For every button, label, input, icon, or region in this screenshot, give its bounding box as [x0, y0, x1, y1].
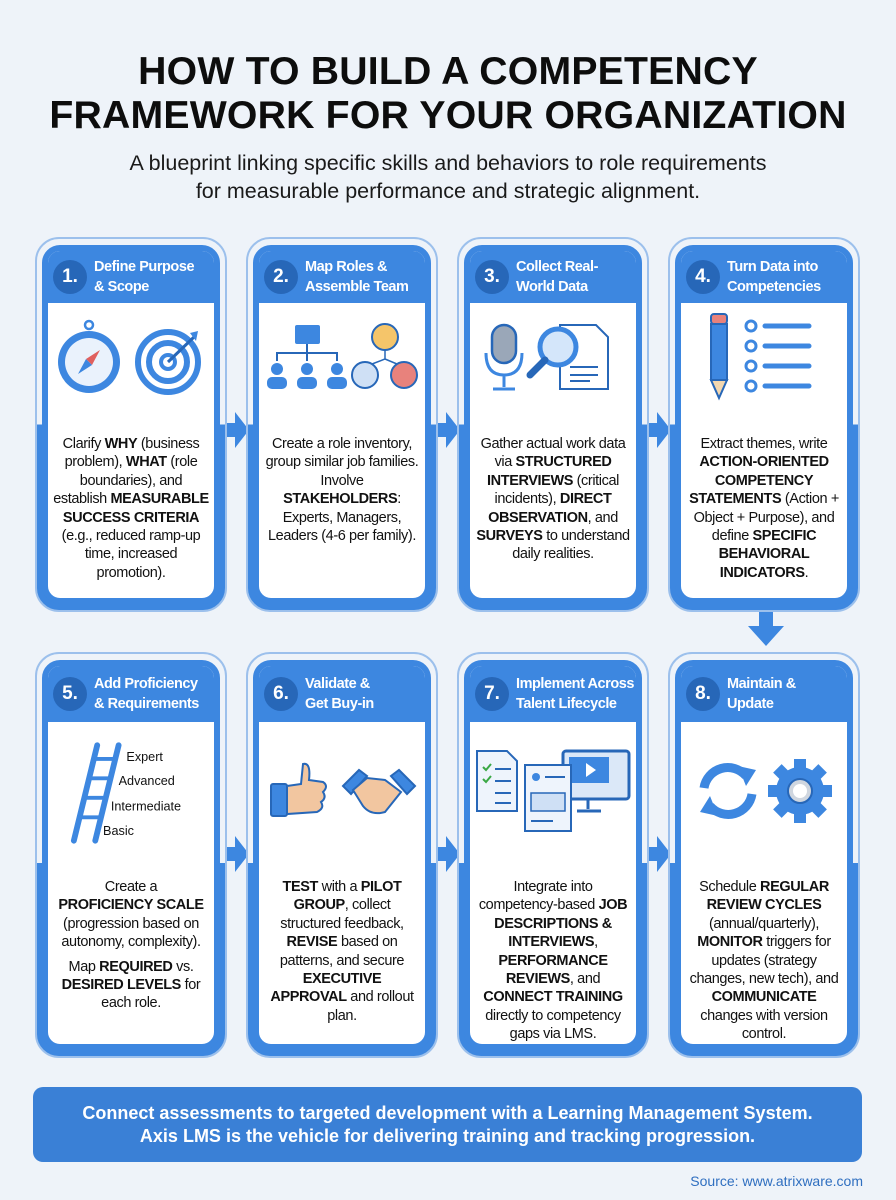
panel: step 5: & Requirements [94, 696, 199, 712]
panel: step 3: World Data [516, 279, 588, 295]
panel: step 6: Get Buy-in [305, 696, 374, 712]
text: step 4: Extract themes, write ACTION-ORIENTED COMPETENCY STATEMENTS (Action + Object + Purpose), and define SPECIFIC BEHAVIORAL INDICATORS. [689, 436, 839, 581]
text: step 3: Gather actual work data via STRUCTURED INTERVIEWS (critical incidents), DIRECT OBSERVATION, and SURVEYS to understand daily realities. [476, 436, 630, 562]
subtitle [130, 151, 766, 203]
text: step 5: PROFICIENCY SCALE (progression based on autonomy, complexity). Map REQUIRED vs. DESIRED LEVELS for each role. [58, 897, 204, 1011]
panel: step 3: 3. [484, 266, 500, 287]
panel: step 5 [35, 652, 227, 1058]
panel: step 1: Define Purpose [94, 259, 194, 275]
arrow 3-4 [649, 412, 668, 448]
panel: step 2: Map Roles & [305, 259, 387, 275]
panel: step 7: Talent Lifecycle [516, 696, 617, 712]
icon: ladder with levels [70, 742, 181, 844]
panel: step 4: Turn Data into [727, 259, 818, 275]
icon: org chart and people [267, 323, 418, 389]
icon: pencil and list [710, 313, 812, 400]
panel: step 2 [246, 237, 438, 612]
icon: ladder with levels: Intermediate [111, 799, 181, 813]
panel: step 5: Add Proficiency [94, 676, 198, 692]
panel: step 4 [668, 237, 860, 612]
panel: step 8: Update [727, 696, 773, 712]
footer banner: Axis LMS is the vehicle for delivering training and tracking progression. [140, 1126, 755, 1146]
panel: step 7 [457, 652, 649, 1058]
panel: step 4: 4. [695, 266, 711, 287]
text: step 8: Schedule REGULAR REVIEW CYCLES (annual/quarterly), MONITOR triggers for updates (strategy changes, new tech), and COMMUNICATE changes with version control. [690, 879, 838, 1042]
icon: documents and monitor [476, 750, 630, 832]
text: step 6: TEST with a PILOT GROUP, collect structured feedback, REVISE based on patterns, and secure EXECUTIVE APPROVAL and rollout plan. [270, 879, 414, 1024]
text: step 2: Create a role inventory, group similar job families. Involve STAKEHOLDERS: Experts, Managers, Leaders (4-6 per family). [266, 436, 418, 544]
title: HOW TO BUILD A COMPETENCY [138, 50, 758, 93]
icon: thumbs up and handshake [270, 762, 416, 817]
icon: ladder with levels: Advanced [119, 774, 175, 788]
title: FRAMEWORK FOR YOUR ORGANIZATION [49, 94, 847, 137]
subtitle: A blueprint linking specific skills and behaviors to role requirements [130, 151, 766, 175]
icon: compass and target [58, 320, 201, 395]
arrow 5-6 [227, 836, 246, 872]
panel: step 6 [246, 652, 438, 1058]
panel: step 2: 2. [273, 266, 289, 287]
panel: step 8 [668, 652, 860, 1058]
panel: step 6: 6. [273, 683, 289, 704]
footer banner: Connect assessments to targeted development with a Learning Management System. [82, 1103, 813, 1123]
panel: step 1: 1. [62, 266, 78, 287]
panel: step 7: 7. [484, 683, 500, 704]
arrow 4-5 down [748, 612, 784, 646]
text: step 1: Clarify WHY (business problem), WHAT (role boundaries), and establish MEASURABLE SUCCESS CRITERIA (e.g., reduced ramp-up time, increased promotion). [53, 436, 209, 581]
panel: step 8: 8. [695, 683, 711, 704]
panel: step 1 [35, 237, 227, 612]
arrow 6-7 [438, 836, 457, 872]
panel: step 1: & Scope [94, 279, 149, 295]
panel: step 6: Validate & [305, 676, 370, 692]
arrow 1-2 [227, 412, 246, 448]
arrow 7-8 [649, 836, 668, 872]
icon: ladder with levels: Expert [126, 749, 163, 763]
text: step 7: Integrate into competency-based JOB DESCRIPTIONS & INTERVIEWS, PERFORMANCE REVIEWS, and CONNECT TRAINING directly to competency gaps via LMS. [479, 879, 627, 1042]
title [49, 50, 847, 137]
panel: step 5: 5. [62, 683, 78, 704]
panel: step 3: Collect Real- [516, 259, 598, 275]
subtitle: for measurable performance and strategic alignment. [196, 179, 700, 203]
source: Source: www.atrixware.com [690, 1173, 863, 1189]
panel: step 7: Implement Across [516, 676, 634, 692]
icon: ladder with levels: Basic [103, 823, 134, 837]
panel: step 8: Maintain & [727, 676, 796, 692]
panel: step 4: Competencies [727, 279, 821, 295]
panel: step 3 [457, 237, 649, 612]
icon: microphone and magnifier [484, 324, 609, 390]
text: step 5: Create a [105, 879, 157, 895]
icon: refresh and gear [700, 759, 832, 823]
panel: step 2: Assemble Team [305, 279, 408, 295]
footer banner [33, 1087, 862, 1162]
arrow 2-3 [438, 412, 457, 448]
